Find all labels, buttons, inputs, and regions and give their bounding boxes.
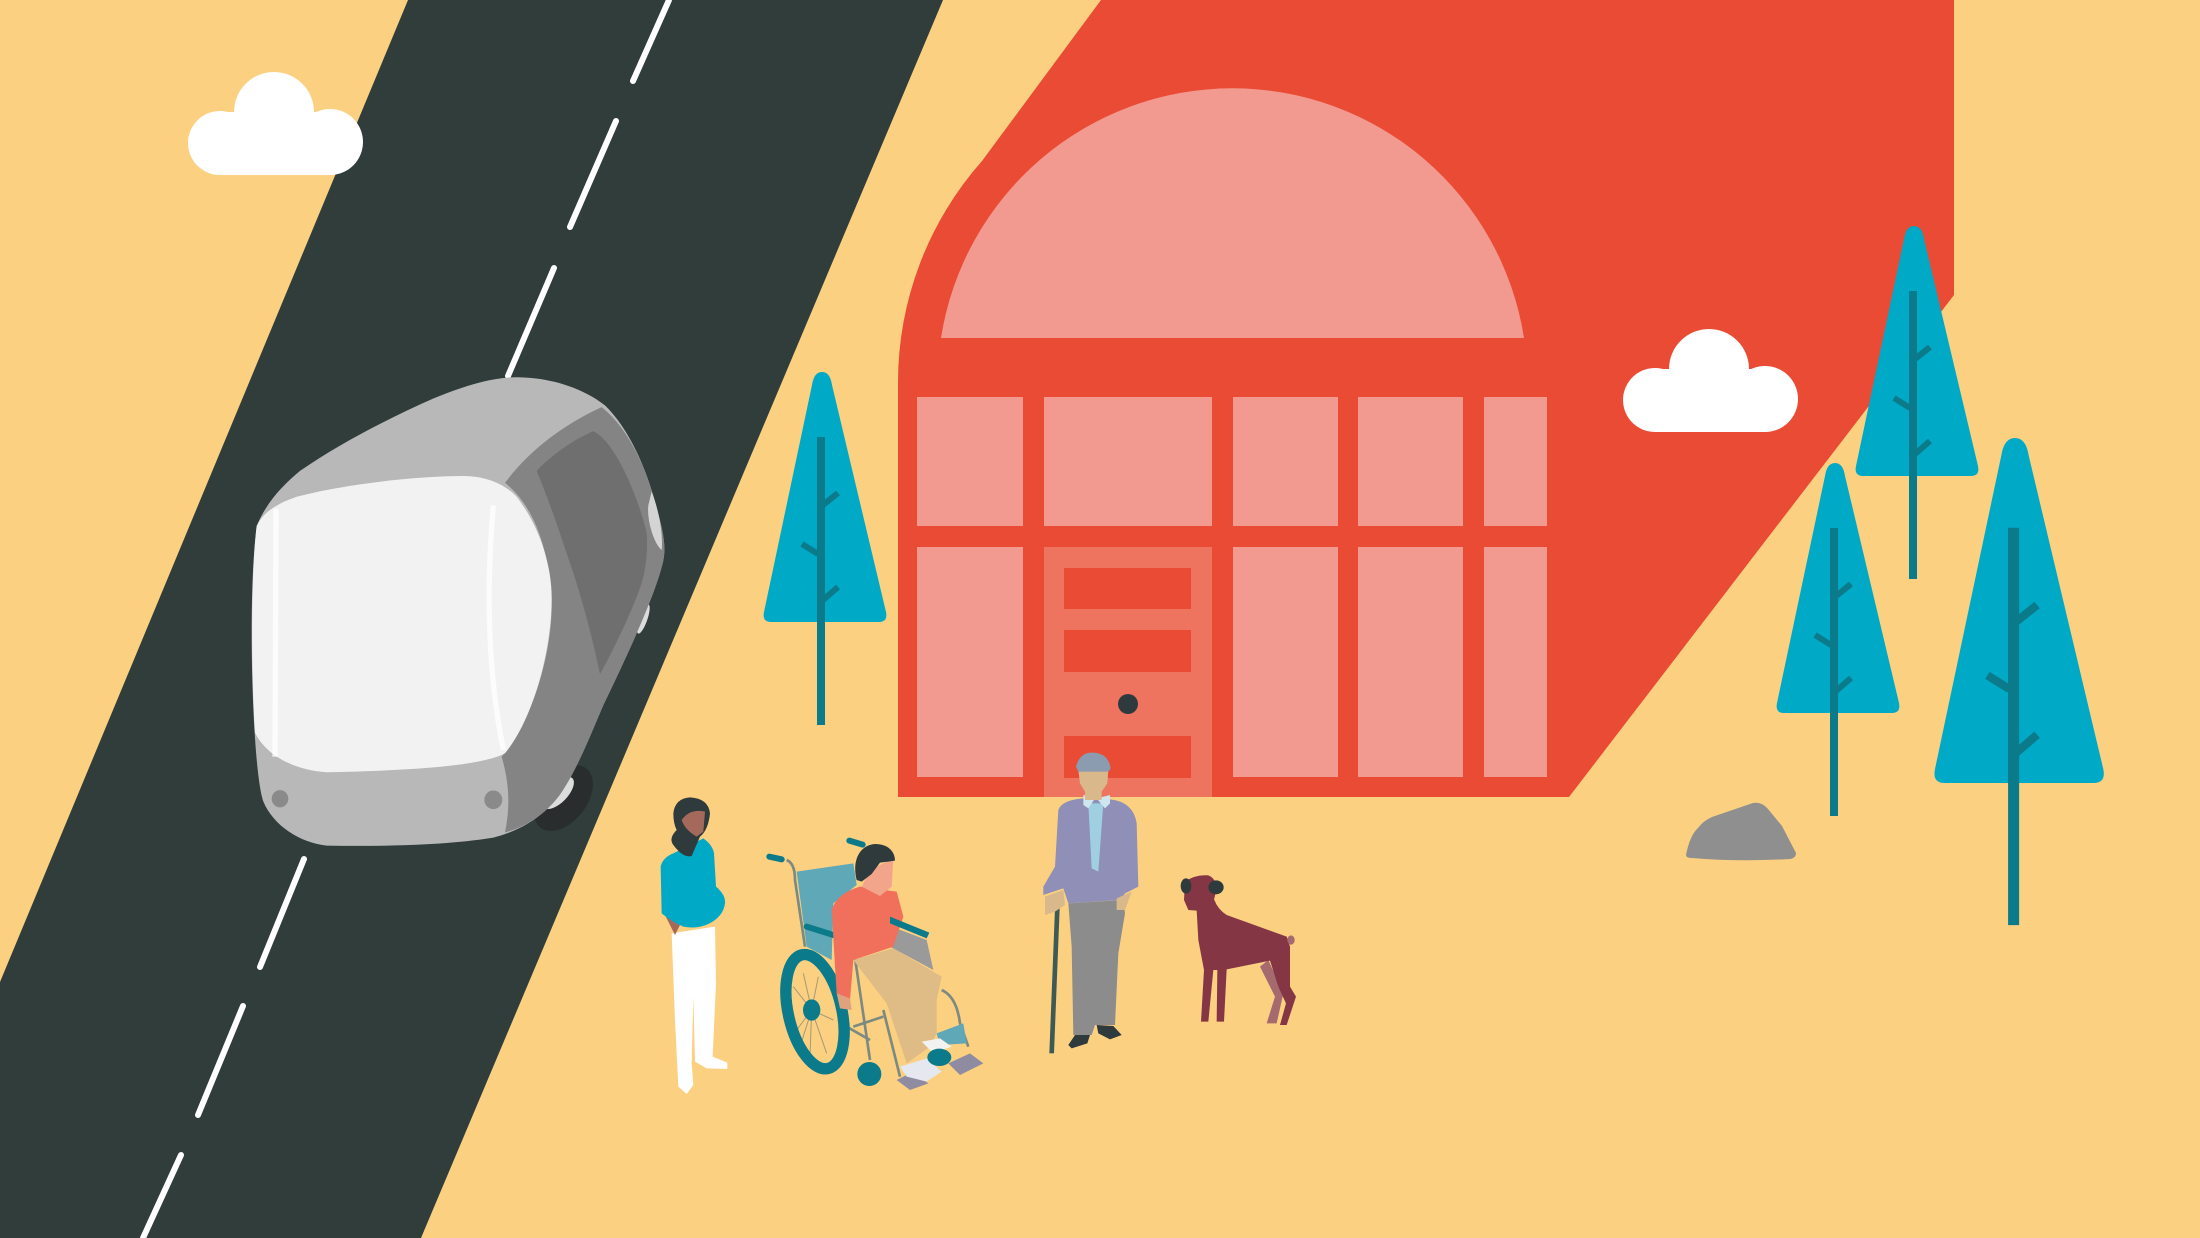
cap — [1076, 753, 1111, 772]
tree: beside building — [764, 372, 886, 725]
hand — [837, 993, 852, 1010]
side panel — [890, 927, 933, 970]
shirt — [1088, 803, 1103, 872]
person: pregnant woman — [661, 797, 727, 1094]
rear leg light — [1260, 960, 1283, 1023]
collar — [1083, 795, 1110, 808]
hands — [1045, 890, 1132, 915]
hub — [803, 999, 820, 1021]
wheels — [538, 603, 652, 814]
person: man in wheelchair — [769, 841, 983, 1090]
side window — [537, 431, 647, 674]
face — [862, 858, 893, 896]
side panel — [502, 407, 664, 832]
side light — [648, 492, 662, 550]
handles — [769, 841, 863, 935]
hand — [665, 915, 680, 935]
hair — [671, 797, 710, 856]
trousers — [853, 948, 942, 1063]
person: elderly man with cane — [1043, 753, 1138, 1053]
chair frame — [787, 860, 968, 1077]
dog — [1181, 875, 1296, 1025]
trousers — [1068, 900, 1125, 1035]
windows — [917, 397, 1547, 777]
shoes — [1068, 1025, 1122, 1048]
body — [1184, 875, 1296, 1025]
jacket — [1043, 798, 1138, 903]
windscreen — [252, 476, 552, 772]
ears — [1181, 878, 1224, 894]
headlights — [272, 790, 502, 809]
cloud: right — [1623, 329, 1798, 432]
tail — [1287, 935, 1295, 945]
windscreen highlights — [275, 505, 503, 757]
shoes — [922, 1038, 952, 1053]
cane — [1052, 908, 1057, 1053]
top — [661, 838, 725, 928]
cloud: left — [188, 72, 363, 175]
autonomous shuttle vehicle — [252, 377, 664, 846]
shuttle body — [252, 377, 664, 846]
spokes — [793, 973, 833, 1057]
door — [1044, 547, 1212, 797]
tree: middle right — [1777, 463, 1899, 816]
big wheel — [776, 949, 854, 1075]
road — [0, 0, 943, 1238]
armrest — [890, 917, 929, 938]
wheel shadow — [522, 754, 605, 843]
building — [898, 0, 1954, 797]
neck and face — [1078, 770, 1108, 800]
casters — [857, 1062, 881, 1086]
trousers — [672, 927, 727, 1094]
backrest — [797, 863, 857, 960]
tree: upper right — [1856, 226, 1978, 579]
face — [682, 811, 705, 837]
dome window — [941, 88, 1524, 338]
shirt — [832, 887, 903, 1000]
hair — [855, 844, 895, 882]
rock — [1686, 803, 1796, 860]
leg support — [937, 1023, 967, 1045]
footrests — [948, 1053, 983, 1075]
tree: large right — [1934, 438, 2104, 925]
